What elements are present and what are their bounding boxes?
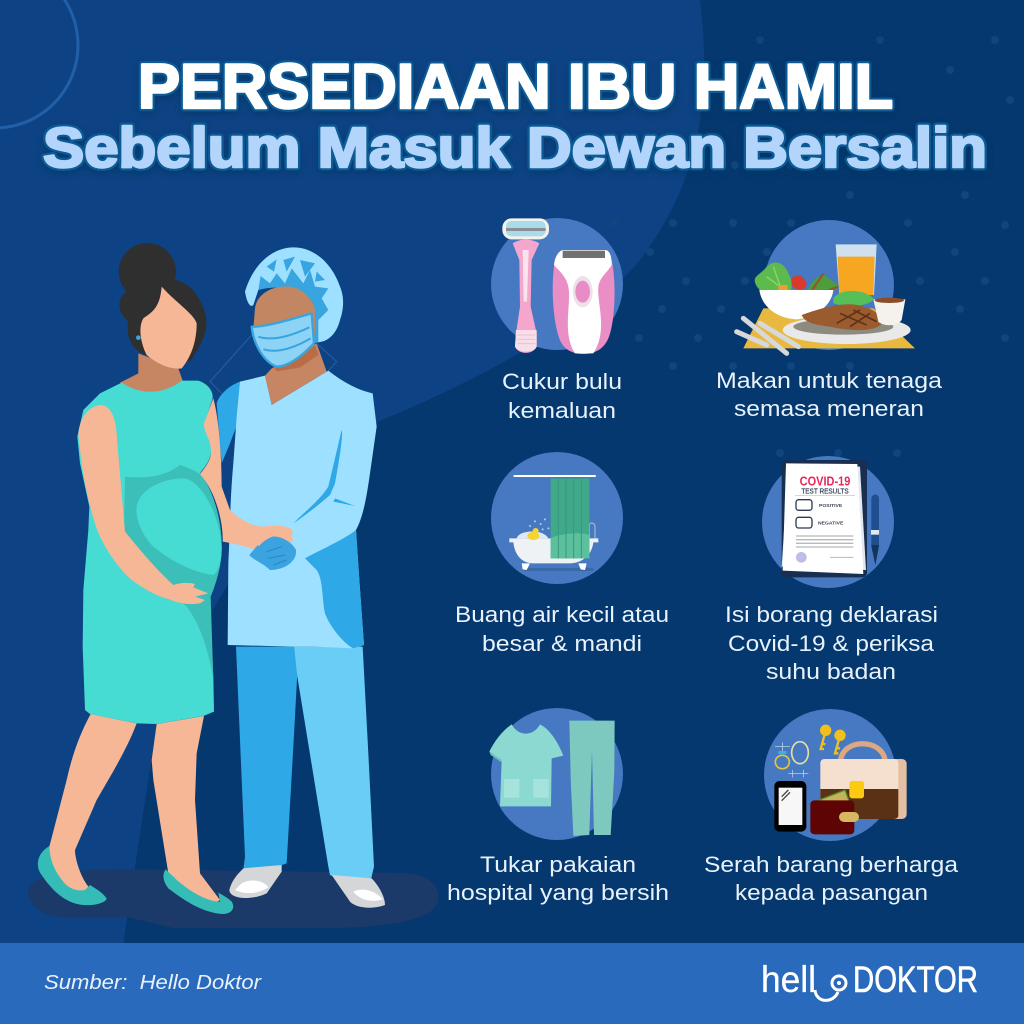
logo: hell (761, 959, 816, 1000)
icon: covid test form: POSITIVE (819, 503, 843, 509)
source text: Sumber: Hello Doktor (44, 972, 262, 994)
woman face (140, 287, 197, 369)
item: bath: besar & mandi (482, 631, 642, 656)
item: clothes: hospital yang bersih (447, 880, 669, 905)
label: Buang air kecil atau (455, 602, 669, 627)
dress shadow (124, 465, 222, 680)
icon: razor and epilator (502, 218, 615, 354)
item: meal (716, 220, 943, 421)
item: covid form (725, 456, 938, 684)
logo (761, 959, 978, 1000)
item: covid form: suhu badan (766, 659, 896, 684)
woman dress (77, 381, 222, 724)
illustration: nurse (200, 247, 385, 908)
item: valuables (704, 709, 959, 905)
illustration: pregnant woman (38, 243, 233, 914)
nurse neck (265, 343, 327, 405)
woman left leg (49, 714, 137, 892)
icon: hospital clothes (489, 721, 615, 836)
title: PERSEDIAAN IBU HAMIL (138, 52, 893, 122)
logo: DOKTOR (853, 959, 978, 1000)
item: valuables: kepada pasangan (735, 880, 928, 905)
icon: bathtub (509, 475, 598, 571)
circle (491, 218, 623, 350)
face mask (252, 313, 314, 367)
nurse back arm (217, 382, 240, 463)
woman arm on belly (78, 405, 208, 604)
surgical cap (245, 247, 343, 342)
label: Cukur bulu (502, 369, 622, 394)
icon: valuables (774, 725, 907, 834)
title: Sebelum Masuk Dewan Bersalin (43, 116, 987, 180)
decorative diamond (210, 335, 337, 393)
circle (491, 452, 623, 584)
circle (764, 220, 894, 350)
footer band (0, 943, 1024, 1024)
item: clothes (447, 708, 669, 905)
label: Serah barang berharga (704, 852, 959, 877)
item: meal: semasa meneran (734, 396, 924, 421)
icon: meal (737, 244, 915, 353)
woman right leg (152, 716, 220, 904)
title: Sebelum Masuk Dewan Bersalin (43, 116, 987, 180)
circle (762, 456, 894, 588)
woman bun and hair (119, 243, 206, 362)
blue glove (249, 536, 296, 570)
label: Makan untuk tenaga (716, 368, 943, 393)
item: bath (455, 452, 669, 656)
icon: covid test form (782, 460, 879, 577)
title (43, 52, 987, 180)
gown shading (305, 530, 364, 648)
item: shaving: kemaluan (508, 398, 616, 423)
woman shoes (38, 846, 233, 914)
belly (136, 478, 222, 575)
label: Tukar pakaian (480, 852, 636, 877)
item: shaving (491, 218, 623, 423)
icon: covid test form: NEGATIVE (818, 520, 844, 526)
nurse gown (228, 371, 377, 648)
title: PERSEDIAAN IBU HAMIL (138, 52, 893, 122)
circle (764, 709, 896, 841)
label: Isi borang deklarasi (725, 602, 938, 627)
nurse pants (236, 647, 297, 870)
woman neck (120, 353, 183, 393)
item: covid form: Covid-19 & periksa (728, 631, 935, 656)
ground shadow (28, 869, 438, 928)
icon: covid test form: COVID-19 (800, 474, 850, 488)
icon: covid test form: TEST RESULTS (801, 488, 849, 495)
nurse face (253, 286, 315, 337)
nurse shoes (229, 865, 282, 898)
woman right arm (200, 398, 293, 550)
earring (136, 335, 141, 340)
circle (491, 708, 623, 840)
